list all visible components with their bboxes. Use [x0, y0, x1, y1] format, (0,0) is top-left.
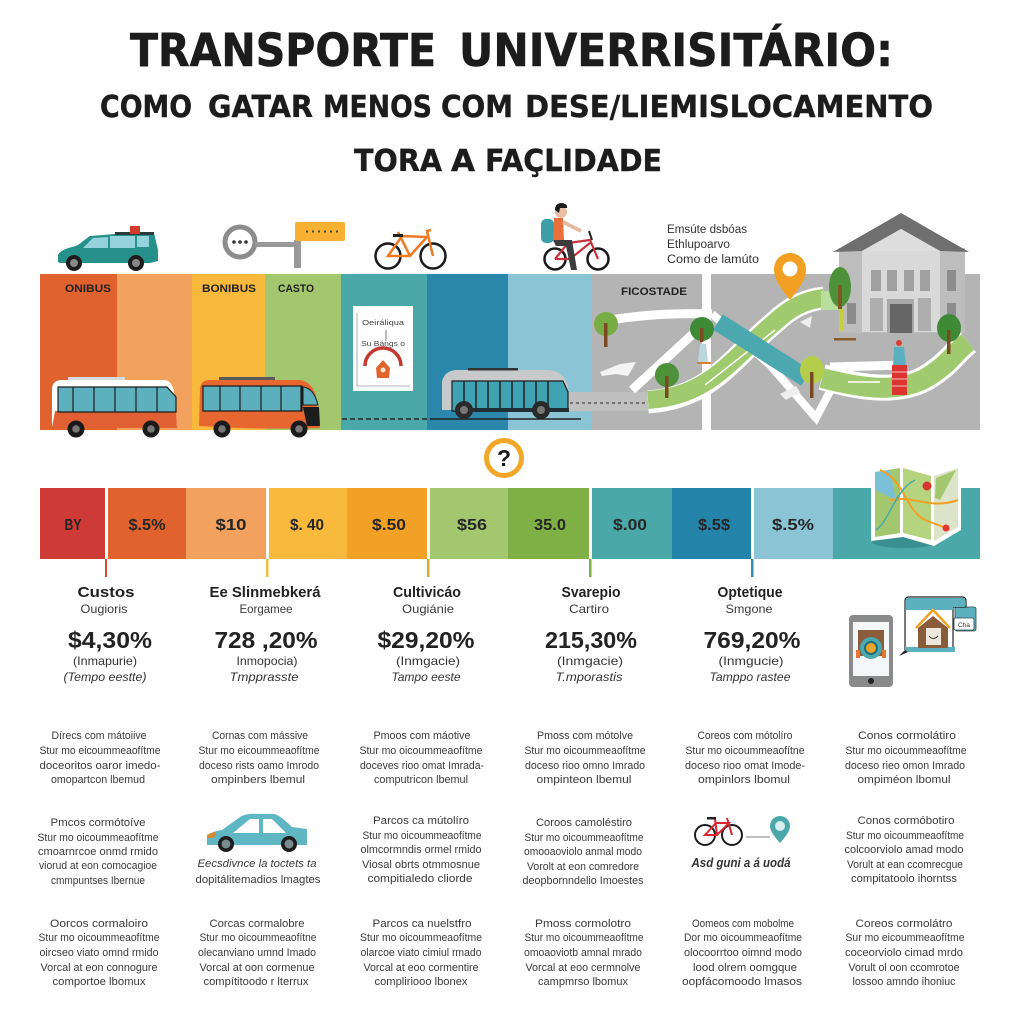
- text block: row 3 column 6: Vorult ol oon ccomrotoe: [848, 962, 960, 974]
- text block: row 3 column 6: [845, 918, 964, 988]
- stat column: cultivicão: Cultivicáo: [393, 584, 461, 601]
- text block: row 1 column 4: ompinteon lbemul: [536, 774, 632, 786]
- title: FAÇLIDADE: [485, 144, 662, 179]
- text block: row 1 column 1: [40, 730, 161, 786]
- title: GATAR: [208, 90, 313, 125]
- title: MENOS: [323, 90, 432, 125]
- panel: price scale: $.50: [372, 517, 406, 534]
- stat column: ee simmebkerá: Inmopocia): [236, 654, 298, 668]
- stat column: cultivicão: (Inmgacie): [396, 654, 460, 668]
- icon: teal car on roof line: [58, 226, 158, 271]
- text block: row 3 column 3: Parcos ca nuelstfro: [372, 918, 472, 930]
- text block: row 2 column 3: olmcormndis ormel rmido: [360, 844, 482, 856]
- text block: row 2 column 6: Conos cormóbotiro: [858, 815, 954, 827]
- stat column: custos: Ougioris: [80, 602, 128, 616]
- text block: row 1 column 5: [685, 730, 805, 786]
- text block: row 3 column 1: Oorcos cormaloiro: [50, 918, 148, 930]
- text block: row 2 column 3: Viosal obrts otmmosnue: [362, 859, 480, 871]
- text block: row 2 column 1: viorud at eon comocagioe: [39, 860, 157, 872]
- text block: row 1 column 1: doceoritos oaror imedo-: [40, 760, 161, 772]
- panel: price scale: $.5%: [772, 517, 814, 534]
- text block: row 1 column 6: Stur mo oicoummeaofítme: [846, 745, 966, 757]
- text block: row 3 column 1: Vorcal at eon connogure: [40, 962, 158, 974]
- road connector: [568, 392, 648, 411]
- text block: row 2 column 1: Pmcos cormótoíve: [50, 817, 146, 829]
- text block: row 1 column 5: Stur mo oicoummeaofítne: [686, 745, 804, 757]
- title: COM: [441, 90, 513, 125]
- stat column: optetique: Optetique: [718, 584, 782, 601]
- text block: row 2 column 6: Vorult at ean ccomrecgue: [847, 859, 963, 871]
- text block: row 2 column 4: omooaoviolo anmal modo: [524, 846, 642, 858]
- text block: row 2 column 3: compitialedo cliorde: [368, 873, 472, 885]
- stat column: optetique: [704, 584, 800, 684]
- text block: row 2 column 1: [38, 817, 158, 887]
- icon: tram bus: [442, 368, 570, 419]
- text block: row 3 column 5: olocoorrtoo oimnd modo: [684, 947, 802, 959]
- text block: row 2 column 6: Stur mo oicoummeaofítme: [846, 830, 964, 842]
- icon: tablet with house: [899, 597, 976, 656]
- stat column: cultivicão: Tampo eeste: [392, 670, 461, 684]
- text block: row 1 column 1: Dírecs com mátoiive: [52, 730, 146, 742]
- text block: row 3 column 2: Corcas cormalobre: [210, 918, 304, 930]
- stat column: custos: Custos: [78, 584, 134, 601]
- text block: row 3 column 6: Sur mo eicoummeaofítme: [846, 932, 964, 944]
- text block: row 1 column 2: doceso rists oamo Imrodo: [199, 760, 319, 772]
- text block: row 3 column 4: [524, 918, 644, 988]
- icon: white and orange bus: [52, 377, 177, 438]
- text block: row 3 column 6: lossoo amndo ihoniuc: [852, 976, 956, 988]
- text block: row 3 column 3: Vorcal at eoo cormentire: [364, 962, 478, 974]
- text block: row 1 column 6: doceso rieo omon Imrado: [845, 760, 965, 772]
- text block: row 2 column 3: Parcos ca mútolíro: [373, 815, 469, 827]
- icon: orange bicycle: [376, 230, 446, 268]
- text block: row 3 column 2: olecanviano umnd Imado: [198, 947, 316, 959]
- text block: row 3 column 1: Stur mo oicoummeaofítme: [38, 932, 160, 944]
- text block: row 2 column 6: colcoorviolo amad modo: [844, 844, 964, 856]
- title: COMO: [100, 90, 192, 125]
- car caption: Eecsdivnce la toctets ta: [198, 858, 316, 870]
- text block: row 3 column 4: omoaoviotb amnal mrado: [524, 947, 642, 959]
- car caption: [196, 858, 321, 886]
- text block: row 2 column 4: deopbornndelio Imoestes: [522, 875, 644, 887]
- stat column: optetique: Smgone: [726, 602, 773, 616]
- stat column: ee simmebkerá: [210, 584, 321, 684]
- text block: row 2 column 3: Stur mo oicoummeaofítme: [362, 830, 482, 842]
- stat column: svarepio: (Inmgacie): [557, 654, 623, 668]
- bike caption: Asd guni a á uodá: [691, 856, 791, 870]
- text block: row 3 column 3: Stur mo oicoummeaofítme: [360, 932, 482, 944]
- text block: row 2 column 1: cmmpuntses Ibernue: [51, 875, 145, 887]
- panel: transport route band: BONIBUS: [202, 283, 256, 295]
- text block: row 3 column 3: [360, 918, 482, 988]
- title: [100, 24, 933, 179]
- text block: row 1 column 3: Pmoos com máotive: [374, 730, 470, 742]
- text block: row 3 column 2: Stur mo oicoummeaofítne: [200, 932, 316, 944]
- panel: price scale: $56: [457, 517, 487, 534]
- text block: row 3 column 6: Coreos cormolátro: [856, 918, 952, 930]
- text block: row 3 column 2: Vorcal at oon cormenue: [200, 962, 314, 974]
- icon: orange bus: [199, 377, 320, 438]
- text block: row 3 column 3: compliriooo lbonex: [374, 976, 468, 988]
- text block: row 2 column 1: cmoarnrcoe onmd rmido: [38, 846, 158, 858]
- text block: row 3 column 2: [198, 918, 316, 988]
- text grid row 2: [38, 814, 964, 887]
- panel: price scale: 35.0: [534, 517, 566, 534]
- stat column: cultivicão: Ougiánie: [402, 602, 454, 616]
- icon: cyclist with backpack: [541, 203, 608, 270]
- stat column: custos: $4,30%: [68, 627, 152, 653]
- text block: row 2 column 1: Stur mo oicoummeaofítme: [38, 832, 158, 844]
- map caption: Ethlupoarvo: [667, 239, 730, 251]
- text block: row 1 column 4: Stur mo oicoummeaofítme: [524, 745, 646, 757]
- car caption: dopitálitemadios lmagtes: [196, 874, 321, 886]
- stat column: cultivicão: $29,20%: [378, 627, 474, 653]
- text grid row 1: [40, 730, 966, 786]
- panel: transport route band: [40, 274, 980, 430]
- panel: price scale: $10: [216, 517, 247, 534]
- text block: row 3 column 5: lood olrem oomgque: [693, 962, 797, 974]
- icon: red bicycle with teal pin: [695, 816, 790, 845]
- map caption: Como de lamúto: [667, 254, 759, 266]
- panel: price scale: $.00: [613, 517, 647, 534]
- stat column: ee simmebkerá: Tmpprasste: [230, 670, 299, 684]
- icon: smartphone with app: [849, 615, 893, 687]
- icon: notice poster with gauge: [353, 306, 413, 391]
- text block: row 1 column 6: [845, 730, 966, 786]
- panel: transport route band: CASTO: [278, 283, 314, 295]
- icon: university building: [833, 213, 969, 333]
- text block: row 1 column 5: ompinlors lbomul: [698, 774, 790, 786]
- stat column: optetique: 769,20%: [704, 627, 800, 653]
- icon: notice poster with gauge: Oeiráliqua: [362, 318, 405, 327]
- panel: price scale: [40, 488, 980, 559]
- map: white and green roads: [610, 291, 968, 418]
- text block: row 3 column 4: campmrso lbomux: [538, 976, 628, 988]
- stat column: custos: (Tempo eestte): [64, 670, 146, 684]
- map: trees and pedestrians: [594, 267, 961, 400]
- text block: row 1 column 5: doceso rioo omat Imode-: [685, 760, 805, 772]
- stat column: ee simmebkerá: Eorgamee: [240, 602, 293, 616]
- icon: tablet with house: Cha: [958, 622, 970, 629]
- icon: pedestrian on red barrier: [892, 340, 907, 395]
- text block: row 1 column 5: Coreos com mótolíro: [698, 730, 792, 742]
- icon: signpost with speech circle: [225, 222, 345, 268]
- text block: row 1 column 6: Conos cormolátiro: [858, 730, 956, 742]
- text block: row 2 column 4: Stur mo oicoummeaofítme: [524, 832, 644, 844]
- icon: question mark badge: ?: [497, 445, 511, 471]
- stat column: svarepio: T.mporastis: [556, 670, 622, 684]
- text block: row 1 column 3: doceves rioo omat Imrada-: [360, 760, 484, 772]
- text block: row 1 column 2: [198, 730, 320, 786]
- icon: teal car: [207, 814, 307, 852]
- stat column: optetique: (Inmgucie): [718, 654, 784, 668]
- text block: row 1 column 4: [524, 730, 646, 786]
- title: UNIVERRISITÁRIO:: [459, 24, 893, 77]
- stat column: cultivicão: [378, 584, 474, 684]
- text block: row 1 column 4: doceso rioo omno Imrado: [525, 760, 645, 772]
- text block: row 1 column 1: Stur mo eicoummeaofítme: [40, 745, 160, 757]
- map caption: [667, 224, 759, 266]
- stat column: svarepio: Svarepio: [562, 584, 620, 601]
- text block: row 2 column 3: [360, 815, 482, 885]
- stat column: custos: [64, 584, 152, 684]
- text block: row 1 column 3: [360, 730, 484, 786]
- title: TRANSPORTE: [130, 24, 436, 77]
- stat column: ee simmebkerá: 728 ,20%: [214, 627, 318, 653]
- text block: row 3 column 5: [682, 918, 803, 988]
- stat column: ee simmebkerá: Ee Slinmebkerá: [210, 584, 321, 601]
- title: A: [451, 144, 475, 179]
- text block: row 1 column 1: omopartcon lbemud: [51, 774, 145, 786]
- stat column: svarepio: [545, 584, 637, 684]
- text block: row 1 column 2: ompinbers lbemul: [211, 774, 305, 786]
- text block: row 1 column 3: Stur mo oicoummeaofítme: [360, 745, 482, 757]
- text block: row 3 column 4: Stur mo oicoummeaofítme: [524, 932, 644, 944]
- text block: row 1 column 6: ompiméon lbomul: [858, 774, 950, 786]
- text block: row 2 column 4: [522, 817, 644, 887]
- scale tick marks: [105, 559, 754, 577]
- stat column: svarepio: 215,30%: [545, 627, 637, 653]
- panel: transport route band: FICOSTADE: [621, 286, 687, 298]
- text block: row 2 column 4: Coroos camoléstiro: [536, 817, 632, 829]
- panel: transport route band: ONIBUS: [65, 283, 111, 295]
- dashed route line under tram: [342, 418, 581, 420]
- text block: row 1 column 3: computricon lbemul: [374, 774, 468, 786]
- text block: row 3 column 3: olarcoe viato cimiul rmado: [360, 947, 482, 959]
- text block: row 3 column 5: Dor mo oicoummeaofítme: [684, 932, 802, 944]
- icon: orange location pin: [774, 253, 806, 300]
- text block: row 3 column 4: Pmoss cormolotro: [535, 918, 631, 930]
- text block: row 3 column 2: compítitoodo r lterrux: [204, 976, 309, 988]
- title: TORA: [354, 144, 442, 179]
- text block: row 2 column 6: [844, 815, 964, 885]
- text grid row 3: [38, 918, 964, 988]
- text block: row 2 column 4: Vorolt at eon comredore: [527, 861, 639, 873]
- text block: row 3 column 6: coceorviolo cimad mrdo: [845, 947, 963, 959]
- icon: question mark badge: [486, 440, 522, 476]
- text block: row 3 column 1: [38, 918, 160, 988]
- panel: price scale: $. 40: [290, 517, 324, 534]
- icon: folded city map: [871, 463, 961, 548]
- title: DESE/LIEMISLOCAMENTO: [525, 90, 933, 125]
- text block: row 3 column 4: Vorcal at eoo cermnolve: [526, 962, 640, 974]
- text block: row 1 column 2: Cornas com mássive: [212, 730, 308, 742]
- text block: row 1 column 2: Stur mo eicoummeaofítme: [198, 745, 320, 757]
- stat column: svarepio: Cartiro: [569, 602, 609, 616]
- icon: notice poster with gauge: Su Bángs o: [361, 339, 405, 348]
- stat column: custos: (Inmapurie): [73, 654, 137, 668]
- text block: row 3 column 1: comportoe lbomux: [52, 976, 146, 988]
- text block: row 3 column 5: Oomeos com mobolme: [692, 918, 794, 930]
- panel: price scale: BY: [64, 517, 82, 534]
- text block: row 3 column 5: oopfácomoodo lmasos: [682, 976, 803, 988]
- map caption: Emsúte dsbóas: [667, 224, 747, 236]
- text block: row 1 column 4: Pmoss com mótolve: [537, 730, 633, 742]
- stat column: optetique: Tamppo rastee: [710, 670, 791, 684]
- panel: price scale: $.5$: [698, 517, 730, 534]
- panel: price scale: $.5%: [128, 517, 166, 534]
- text block: row 3 column 1: oircseo viato omnd rmido: [40, 947, 158, 959]
- text block: row 2 column 6: compitatoolo ihorntss: [851, 873, 957, 885]
